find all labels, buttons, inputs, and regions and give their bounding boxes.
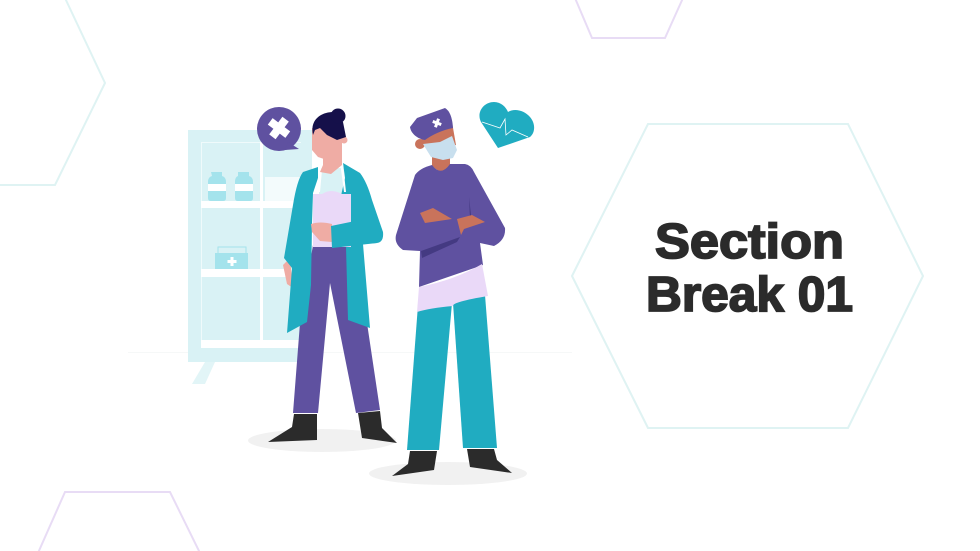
shoes [392, 451, 437, 476]
illustration: nurse [392, 108, 512, 476]
mask [423, 136, 457, 160]
surgical cap [410, 108, 453, 140]
hand on clipboard [311, 222, 332, 242]
tunic hem [417, 264, 488, 312]
hexagon: bottom left [38, 492, 200, 551]
hexagon: top left [0, 0, 105, 185]
ear, neck [415, 139, 425, 149]
arm shadow [421, 237, 460, 258]
hexagon: title frame [572, 124, 923, 428]
forearm [331, 220, 377, 248]
floor shadows [248, 429, 527, 485]
icon: first aid kit [215, 247, 248, 269]
illustration: cabinet [188, 130, 312, 384]
trousers [407, 303, 452, 450]
shirt [396, 164, 505, 287]
shoes [268, 414, 317, 442]
icon: heart with pulse [479, 102, 534, 148]
undershirt [319, 168, 344, 198]
title: Section [655, 215, 844, 269]
trousers [293, 245, 380, 413]
icon: stacked papers [265, 177, 305, 201]
illustration: doctor [257, 107, 397, 443]
coat [284, 167, 318, 333]
icon: medicine bottles [208, 172, 253, 201]
left hand [283, 258, 293, 288]
neck and head [320, 150, 342, 174]
hair [312, 112, 346, 140]
collar [317, 162, 346, 192]
face [420, 122, 456, 152]
crossed hands [420, 208, 452, 223]
title: Break 01 [646, 268, 853, 322]
floor line [128, 352, 572, 353]
speech bubble with cross [257, 107, 301, 151]
clipboard [313, 191, 351, 247]
hexagon: top centre [575, 0, 683, 38]
